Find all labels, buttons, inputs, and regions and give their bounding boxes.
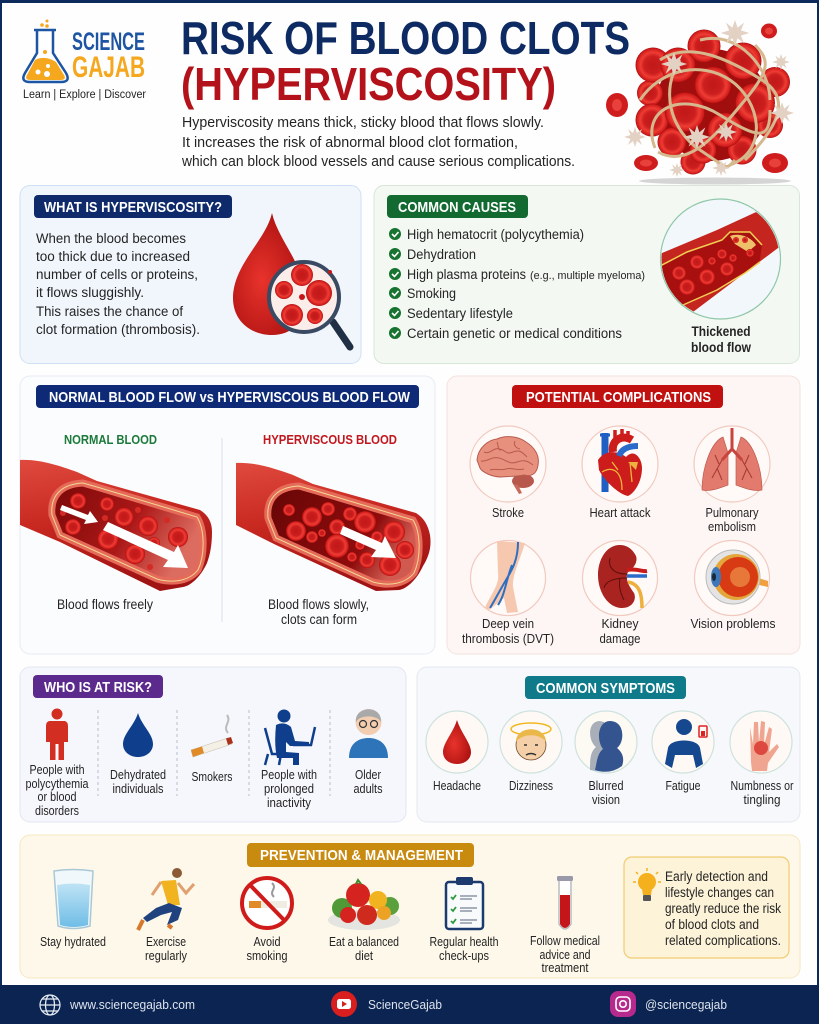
callout: early detection: of blood clots and: [665, 917, 759, 932]
item: headache: Headache: [433, 779, 481, 793]
list: causes: High hematocrit (polycythemia): [407, 227, 584, 242]
item: balanced diet: [328, 880, 400, 963]
item: vision problems: Vision problems: [690, 617, 776, 631]
heading: common causes: COMMON CAUSES: [398, 199, 516, 216]
callout: early detection: Early detection and: [665, 869, 768, 884]
heading: who is at risk: WHO IS AT RISK?: [44, 679, 152, 696]
item: prolonged inactivity: People with: [261, 768, 317, 782]
illustration: hyperviscous vessel: [236, 463, 431, 591]
title: [181, 12, 630, 110]
heading: normal vs hyperviscous: NORMAL BLOOD FLOW vs HYPERVISCOUS BLOOD FLOW: [49, 389, 411, 406]
icon: light bulb: [633, 868, 661, 901]
item: prolonged inactivity: inactivity: [267, 796, 312, 810]
item: fatigue: [652, 711, 714, 793]
title line 1: RISK OF BLOOD CLOTS: [181, 12, 630, 64]
caption: blood flows freely: Blood flows freely: [57, 597, 153, 612]
callout: early detection: [624, 857, 789, 958]
text: definition: number of cells or proteins,: [36, 267, 198, 282]
heading: who is at risk: [33, 675, 163, 698]
item: polycythemia: or blood: [38, 790, 77, 804]
item: heart attack: Heart attack: [590, 506, 651, 520]
item: prolonged inactivity: [261, 710, 317, 810]
heading: prevention and management: PREVENTION & MANAGEMENT: [260, 847, 463, 864]
item: older adults: [349, 709, 388, 796]
panel: who is at risk: [20, 667, 406, 822]
callout: early detection: lifestyle changes can: [665, 885, 774, 900]
item: dehydrated: Dehydrated: [110, 768, 166, 782]
list: causes: Certain genetic or medical conditions: [407, 326, 622, 341]
item: numbness or tingling: [730, 711, 794, 807]
item: stay hydrated: Stay hydrated: [40, 935, 106, 949]
caption: thickened blood flow: [691, 324, 751, 355]
caption: thickened blood flow: Thickened: [692, 324, 750, 339]
text: definition: it flows sluggishly.: [36, 285, 144, 300]
text: definition: clot formation (thrombosis).: [36, 322, 200, 337]
item: dehydrated: individuals: [112, 782, 164, 796]
item: balanced diet: Eat a balanced: [329, 935, 399, 949]
item: headache: [426, 711, 488, 793]
item: pulmonary embolism: embolism: [708, 520, 756, 534]
item: pulmonary embolism: [694, 426, 770, 534]
panel: what is hyperviscosity: [20, 186, 361, 364]
heading: common causes: [387, 195, 528, 218]
caption: blood flows slowly: Blood flows slowly,: [268, 597, 369, 612]
item: blurred vision: vision: [592, 793, 620, 807]
text: definition: [36, 231, 200, 337]
item: medical treatment: [530, 876, 600, 975]
intro text: [181, 114, 575, 170]
item: exercise regularly: [138, 868, 194, 963]
panel: normal vs hyperviscous: [20, 376, 435, 654]
footer: instagram: @sciencegajab: [645, 997, 727, 1012]
item: avoid smoking: smoking: [246, 949, 288, 963]
text: definition: When the blood becomes: [36, 231, 186, 246]
item: kidney damage: damage: [600, 632, 641, 646]
item: blurred vision: Blurred: [588, 779, 624, 793]
item: older adults: Older: [355, 768, 381, 782]
item: polycythemia: polycythemia: [26, 777, 89, 791]
footer: youtube: ScienceGajab: [368, 997, 442, 1012]
illustration: normal vessel: [20, 460, 212, 591]
panel: prevention and management: [20, 835, 800, 978]
illustration: thickened vessel: [655, 199, 782, 319]
icon: flask: [23, 20, 68, 82]
item: fatigue: Fatigue: [666, 779, 701, 793]
item: kidney damage: Kidney: [602, 617, 639, 631]
item: health check-ups: Regular health: [430, 935, 499, 949]
list: causes: Sedentary lifestyle: [407, 306, 513, 321]
item: health check-ups: check-ups: [439, 949, 489, 963]
arrow: large flow: [103, 522, 188, 568]
intro text: Hyperviscosity means thick, sticky blood that flows slowly.: [182, 114, 544, 131]
item: medical treatment: treatment: [542, 961, 589, 975]
title line 2: (HYPERVISCOSITY): [181, 58, 556, 110]
footer: [0, 985, 819, 1024]
heading: what is hyperviscosity: WHAT IS HYPERVISCOSITY?: [44, 199, 222, 216]
heading: prevention and management: [247, 843, 474, 867]
item: exercise regularly: regularly: [145, 949, 188, 963]
logo wordmark: science: SCIENCE: [72, 28, 145, 56]
heading: normal vs hyperviscous: [36, 385, 419, 408]
footer: website: www.sciencegajab.com: [69, 997, 195, 1012]
item: avoid smoking: [242, 878, 292, 963]
item: smokers: [191, 715, 233, 784]
caption: thickened blood flow: blood flow: [691, 340, 751, 355]
item: stroke: Stroke: [492, 506, 524, 520]
heading: common symptoms: COMMON SYMPTOMS: [536, 680, 675, 697]
label: normal blood: NORMAL BLOOD: [64, 432, 157, 447]
icon: instagram: [610, 991, 636, 1017]
item: older adults: adults: [354, 782, 382, 796]
item: heart attack: [582, 426, 658, 520]
icon: globe: [40, 995, 60, 1015]
item: stay hydrated: [40, 870, 106, 949]
item: medical treatment: advice and: [540, 948, 591, 962]
list: causes: [389, 227, 645, 341]
intro text: It increases the risk of abnormal blood clot formation,: [182, 134, 518, 151]
arrow: slow flow: [340, 526, 396, 558]
item: deep vein thrombosis: [462, 540, 554, 646]
item: polycythemia: People with: [30, 763, 85, 777]
item: kidney damage: [582, 540, 658, 646]
caption: blood flows slowly: [268, 597, 369, 627]
item: numbness or tingling: Numbness or: [730, 779, 794, 793]
icon: blood drop with magnifier: [233, 213, 350, 347]
logo: Science Gajab: [23, 20, 146, 101]
item: medical treatment: Follow medical: [530, 934, 600, 948]
list: causes: (e.g., multiple myeloma): [530, 270, 645, 282]
intro text: which can block blood vessels and cause serious complications.: [181, 153, 575, 170]
item: dizziness: [500, 711, 562, 793]
panel: common causes: [374, 186, 800, 364]
text: definition: too thick due to increased: [36, 249, 190, 264]
item: polycythemia: disorders: [35, 804, 79, 818]
panel: potential complications: [447, 376, 800, 654]
list: causes: Smoking: [407, 286, 456, 301]
item: exercise regularly: Exercise: [146, 935, 186, 949]
item: balanced diet: diet: [355, 949, 373, 963]
callout: early detection: greatly reduce the risk: [665, 901, 781, 916]
item: blurred vision: [575, 711, 637, 807]
logo wordmark: gajab: GAJAB: [72, 51, 145, 84]
list: causes: Dehydration: [407, 247, 476, 262]
logo tagline: Learn | Explore | Discover: [23, 89, 146, 101]
arrow: small flow: [60, 505, 98, 524]
item: stroke: [470, 426, 546, 520]
item: prolonged inactivity: prolonged: [264, 782, 314, 796]
item: numbness or tingling: tingling: [744, 793, 781, 807]
illustration: blood clot: [606, 20, 794, 184]
caption: blood flows slowly: clots can form: [281, 612, 357, 627]
callout: early detection: related complications.: [665, 933, 781, 948]
item: polycythemia: [26, 708, 89, 818]
item: pulmonary embolism: Pulmonary: [706, 506, 759, 520]
item: deep vein thrombosis: Deep vein: [482, 617, 534, 631]
item: dehydrated: [110, 713, 166, 796]
item: smokers: Smokers: [192, 770, 232, 784]
blood cells: crowded: [283, 502, 414, 576]
item: health check-ups: [430, 877, 499, 963]
item: deep vein thrombosis: thrombosis (DVT): [462, 632, 554, 646]
panel: common symptoms: [417, 667, 800, 822]
item: vision problems: [690, 540, 776, 631]
heading: what is hyperviscosity: [34, 195, 232, 218]
item: avoid smoking: Avoid: [254, 935, 281, 949]
label: hyperviscous blood: HYPERVISCOUS BLOOD: [263, 432, 397, 447]
item: dizziness: Dizziness: [509, 779, 553, 793]
list: causes: High plasma proteins: [407, 267, 526, 282]
text: definition: This raises the chance of: [36, 304, 183, 319]
icon: youtube: [331, 991, 357, 1017]
heading: potential complications: POTENTIAL COMPLICATIONS: [526, 389, 711, 406]
heading: potential complications: [512, 385, 723, 408]
heading: common symptoms: [525, 676, 686, 699]
